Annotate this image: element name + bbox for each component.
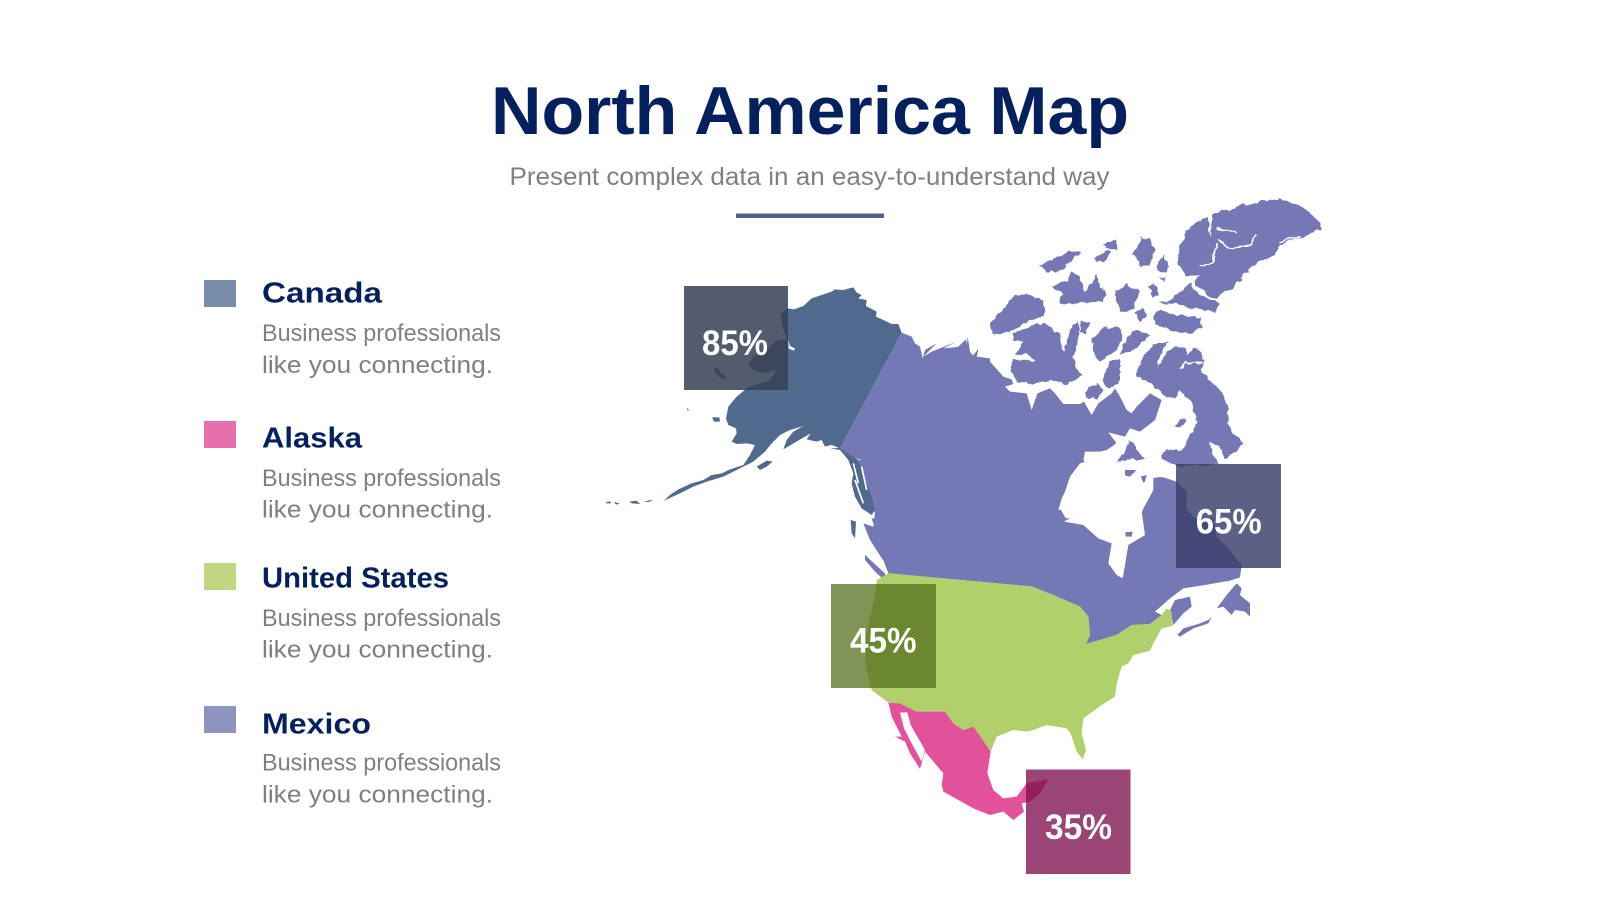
title: North America Map xyxy=(491,73,1129,149)
legend: United States: Business professionals xyxy=(262,605,501,632)
Pacific coast of British Columbia xyxy=(858,460,902,582)
legend: Canada: Canada xyxy=(262,278,383,310)
callout: 85% xyxy=(684,286,788,390)
map region: Alaska xyxy=(606,287,902,505)
callout: 65% xyxy=(1176,464,1281,568)
map region: Canada xyxy=(830,333,1250,644)
map region: Canadian Arctic islands xyxy=(990,199,1322,482)
Canada west and panhandle xyxy=(840,333,992,532)
callout: 65%: 65% xyxy=(1196,502,1262,542)
legend: Canada: like you connecting. xyxy=(262,352,493,379)
legend: Alaska: Business professionals xyxy=(262,465,501,492)
Alaska panhandle xyxy=(830,448,875,538)
callout: 45% xyxy=(831,584,936,688)
callout: 35%: 35% xyxy=(1045,808,1112,847)
Canada south and maritimes xyxy=(872,518,1250,644)
legend: Mexico xyxy=(204,706,501,809)
callout: 35% xyxy=(1026,770,1130,874)
legend: Alaska: like you connecting. xyxy=(262,496,493,524)
title underline xyxy=(736,214,884,218)
legend: Canada xyxy=(204,278,501,379)
map region: United States xyxy=(865,573,1173,759)
map of North America xyxy=(606,199,1322,820)
Canada north mainland xyxy=(958,339,1217,532)
legend: Mexico: Mexico xyxy=(262,708,371,740)
callout: 45%: 45% xyxy=(850,622,916,660)
legend: Mexico: Business professionals xyxy=(262,750,501,777)
legend: United States: United States xyxy=(262,562,449,594)
legend: United States: like you connecting. xyxy=(262,637,493,664)
callout: 85%: 85% xyxy=(702,324,768,363)
map region: Mexico xyxy=(888,703,1048,820)
legend: Mexico: like you connecting. xyxy=(262,782,493,809)
legend: Alaska: Alaska xyxy=(262,423,363,455)
legend: United States xyxy=(204,562,501,664)
legend: Alaska xyxy=(204,421,501,524)
map water: Hudson Bay xyxy=(1058,437,1187,578)
legend: Canada: Business professionals xyxy=(262,320,501,347)
subtitle: Present complex data in an easy-to-understand way xyxy=(510,163,1110,191)
